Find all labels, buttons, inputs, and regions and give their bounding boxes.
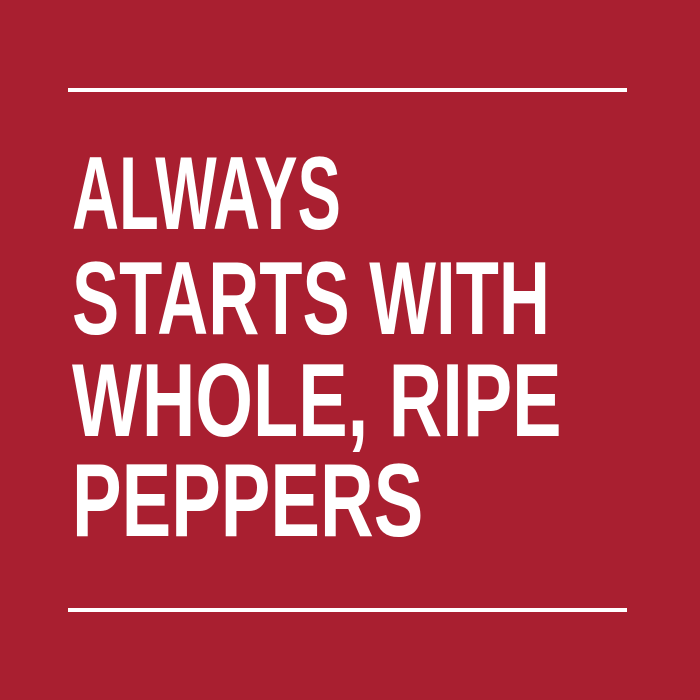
- headline line 3: WHOLE, RIPE: [72, 343, 562, 459]
- headline line 1: ALWAYS: [72, 136, 341, 252]
- headline: [72, 136, 562, 559]
- top rule: [68, 88, 627, 92]
- headline line 4: PEPPERS: [72, 443, 423, 559]
- headline line 2: STARTS WITH: [72, 241, 550, 357]
- bottom rule: [68, 608, 627, 612]
